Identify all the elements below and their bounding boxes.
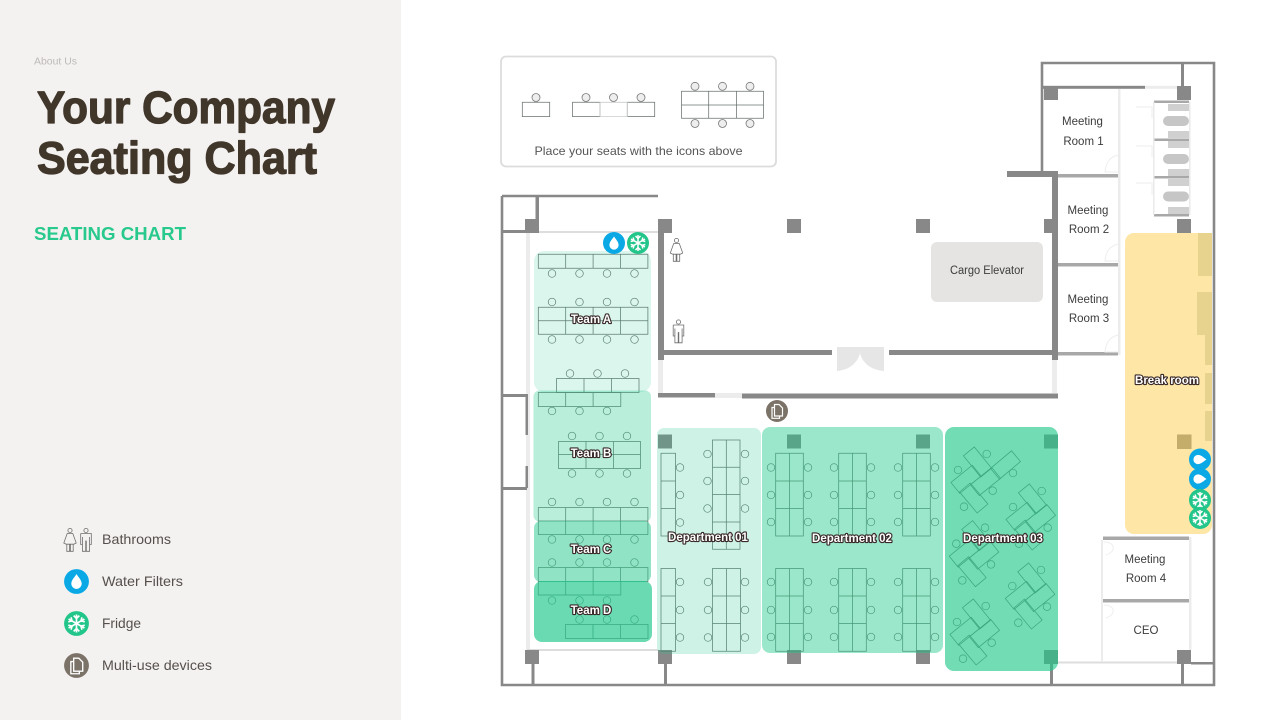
legend item: fridge: Fridge [102,615,141,631]
room labels: CEO [1134,625,1159,637]
zone: team A [534,251,651,392]
room labels: Meeting [1068,205,1108,217]
zone: team B [534,390,651,522]
legend item: bathrooms: Bathrooms [102,531,171,547]
zone: department 02 [762,427,943,653]
zone: department 01 [657,428,761,654]
zone labels: Department 03 [963,533,1043,545]
eyebrow: About Us: About Us [34,56,77,68]
legend item: fridge [64,611,141,636]
icon: multi-use device [766,400,788,422]
room labels [1062,116,1167,637]
icon: break room fridge 2 [1189,507,1211,529]
zone: department 03 [945,427,1058,671]
zone labels [571,314,1199,617]
zone labels: Team B [571,448,611,460]
room labels: Meeting [1068,294,1108,306]
floor plan walls [501,63,1214,685]
room labels: Room 2 [1069,224,1109,236]
legend item: water filters [64,569,183,594]
room labels: Room 4 [1126,573,1167,585]
room labels: Room 3 [1069,313,1109,325]
doors [1104,107,1152,618]
panel: seat icon key [501,56,776,166]
room labels: Room 1 [1063,136,1104,148]
zone: team D [534,581,652,642]
icon: break room water filter 2 [1189,468,1211,490]
seats: department 01 [661,440,749,651]
zone labels: Team C [571,544,611,556]
icon: fridge [627,232,649,254]
columns [525,86,1191,664]
legend item: multi-use devices: Multi-use devices [102,657,212,673]
title: Seating Chart [37,132,317,184]
zone labels: Department 02 [812,533,892,545]
zone: break room [1125,233,1212,534]
panel: left sidebar background [0,0,401,720]
seat icon: double row of desks [682,82,764,128]
seat icon: single desk [522,94,550,117]
double door [837,347,884,371]
icon: water filter [603,232,625,254]
cargo elevator: Cargo Elevator [950,265,1024,277]
subtitle: seating chart: SEATING CHART [34,223,187,244]
title [37,82,335,184]
seats: department 03 [949,447,1056,665]
zone labels: Break room [1135,375,1199,387]
seat icon: row of three desks [572,94,655,117]
legend item: multi-use devices [64,653,212,678]
cargo elevator [931,242,1043,302]
legend item: bathrooms [64,528,171,551]
icon: women's bathroom [670,238,683,261]
room labels: Meeting [1062,116,1103,128]
seats: department 02 [767,453,939,651]
room labels: Meeting [1125,554,1165,566]
legend [64,528,212,678]
icon: break room fridge 1 [1189,489,1211,511]
zone labels: Team D [571,605,611,617]
key caption: Place your seats with the icons above [534,144,743,158]
zone: team C [534,521,651,582]
title: Your Company [37,82,335,133]
legend item: water filters: Water Filters [102,573,183,589]
icons: amenities on the plan [603,232,1211,529]
zone labels: Team A [571,314,611,326]
icon: break room water filter 1 [1189,448,1211,470]
restroom block [1153,100,1190,216]
seats: team rows [538,254,648,639]
icon: men's bathroom [673,320,684,343]
zone labels: Department 01 [668,532,749,544]
